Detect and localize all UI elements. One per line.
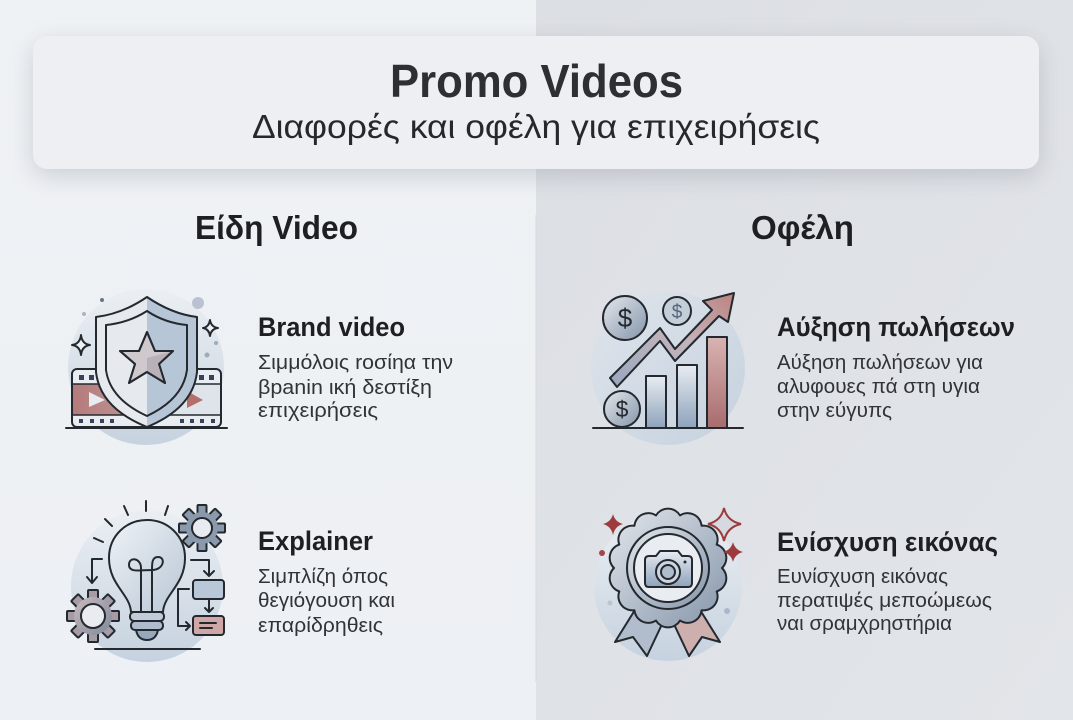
description: Αύξηση πωλήσεων για [777,352,983,374]
description: ναι σραμχρηστήρια [777,613,952,635]
panel background [33,36,1039,169]
arrow [610,293,734,387]
text: explainer [258,526,395,637]
subtitle: Διαφορές και οφέλη για επιχειρήσεις [252,108,820,145]
background: right column [536,0,1073,720]
heading: Αύξηση πωλήσεων [777,312,1015,342]
text: sales growth [777,312,1015,422]
text: image enhancement [777,527,998,635]
title: Promo Videos [390,55,683,107]
camera [645,551,692,587]
description: επαρίδρηθεις [258,615,383,637]
bars [646,376,666,428]
description [258,566,395,637]
icon: rising sales chart: $ [616,396,629,422]
icon: rising sales chart: $ [618,303,633,333]
description: περατιψές μεποώμεως [777,590,992,612]
icon: light bulb with gears and flow [67,501,225,662]
text: brand video [258,312,453,422]
icon: rising sales chart [591,291,745,445]
description: βpanin ική δεστίξη [258,377,432,399]
ribbons [615,605,664,656]
coins [603,296,647,340]
description: αλυφουες πά στη υγια [777,376,980,398]
background: left column [0,0,536,720]
description: επιχειρήσεις [258,400,378,422]
description: θεγιόγουση και [258,590,395,612]
rosette [610,509,726,627]
description: Σιμπλίζη όπος [258,566,388,588]
icon: rising sales chart: $ [672,302,683,323]
description: στην εύγυπς [777,400,892,422]
description [777,566,992,635]
description: Σιμμόλοις rοσίηα την [258,352,453,374]
sparkles [603,514,623,535]
title panel [33,36,1039,169]
heading: Ενίσχυση εικόνας [777,527,998,557]
heading: Brand video [258,312,405,342]
icon: award badge with camera [594,508,743,661]
icon: shield with star and film strips [66,289,227,445]
description: Ευνίσχυση εικόνας [777,566,948,588]
heading: Explainer [258,526,373,556]
heading: video types: Είδη Video [195,209,358,246]
description [258,352,453,422]
description [777,352,983,422]
heading: benefits: Οφέλη [751,209,854,246]
